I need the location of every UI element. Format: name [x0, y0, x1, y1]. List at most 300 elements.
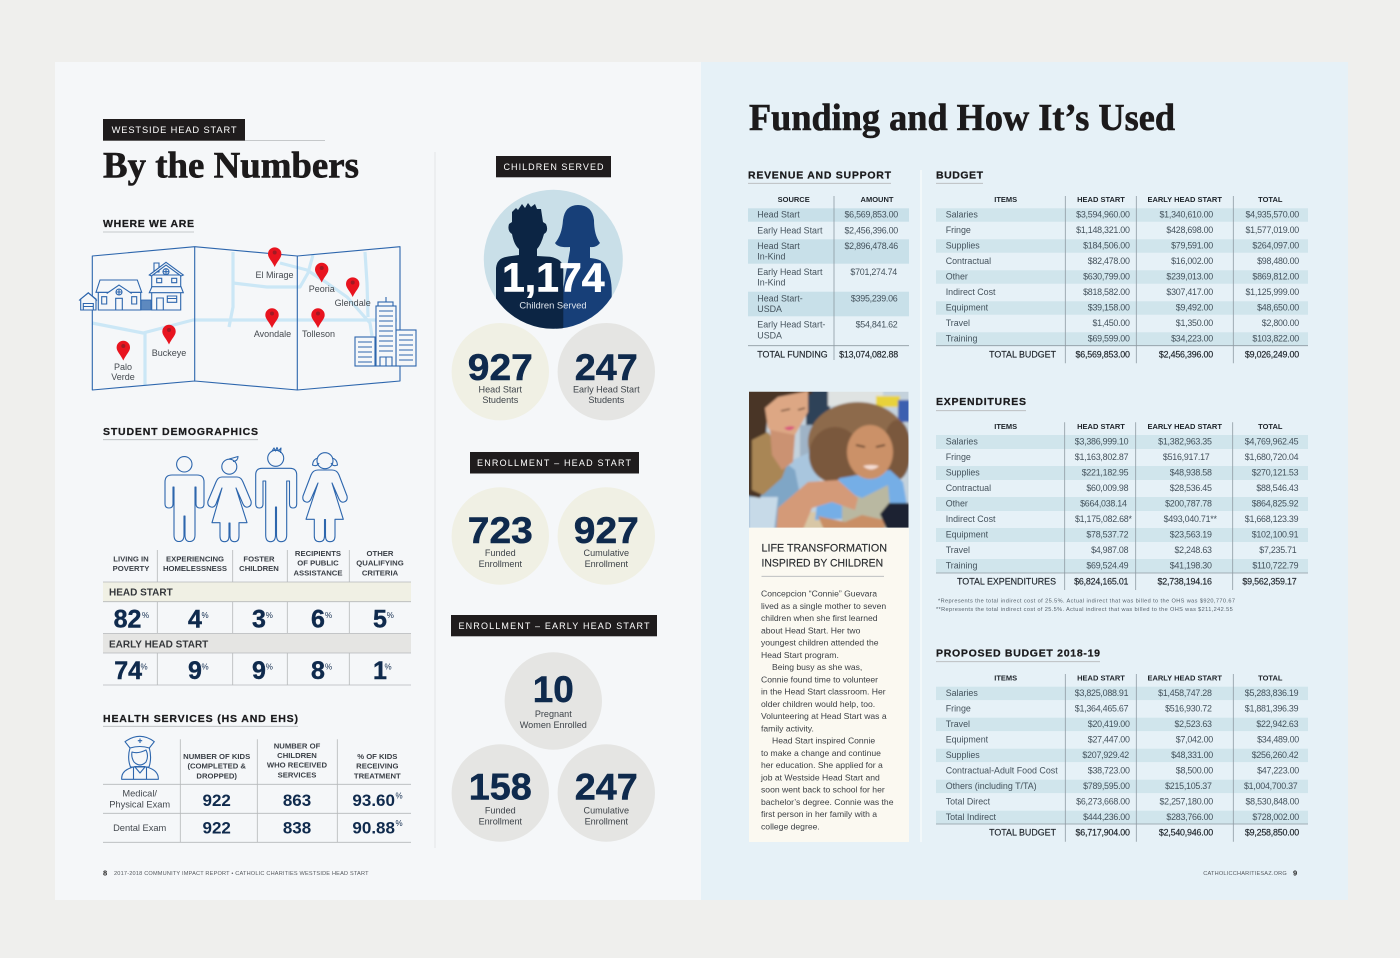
- band: Head Start: [103, 582, 411, 602]
- pin: Buckeye: [152, 325, 186, 358]
- title: Funding and How It's Used: Funding and How It’s Used: [749, 97, 1175, 139]
- table: revenue and support: Head Start: [757, 241, 800, 251]
- table: expenditures: $516,917.17: [1163, 452, 1210, 462]
- table: budget: Supplies: [946, 241, 980, 251]
- table: student demographics: [103, 549, 411, 685]
- table: budget: $82,478.00: [1088, 256, 1130, 266]
- table: proposed budget 2018-19: $2,540,946.00: [1159, 828, 1213, 838]
- table: revenue and support: AMOUNT: [861, 195, 894, 204]
- table: budget: $48,650.00: [1257, 303, 1299, 313]
- column headers: EXPERIENCING: [166, 555, 224, 564]
- table: expenditures: Fringe: [946, 452, 971, 462]
- row: dental exam: 90.88: [352, 819, 395, 838]
- circle: 247 cumulative enrollment: [558, 744, 655, 842]
- circle: 247 Early Head Start students: [558, 323, 655, 420]
- column headers: HOMELESSNESS: [163, 564, 227, 573]
- table: proposed budget 2018-19: $1,881,396.39: [1245, 704, 1299, 714]
- column headers: RECIPIENTS: [295, 549, 341, 558]
- silhouettes: [496, 203, 612, 335]
- title: By the Numbers: By the Numbers: [103, 146, 359, 187]
- table: proposed budget 2018-19: $34,489.00: [1257, 734, 1299, 744]
- table: budget: $16,002.00: [1171, 256, 1213, 266]
- icon: nurse: [122, 736, 158, 779]
- table: budget: $428,698.00: [1166, 225, 1213, 235]
- footnotes: *Represents the total indirect cost of 25.5%. Actual indirect that was billed to the OHS was $920,770.67: [938, 598, 1235, 604]
- Early Head Start percentages: %: [140, 662, 148, 672]
- table: budget: $307,417.00: [1166, 287, 1213, 297]
- story title: [762, 543, 887, 576]
- heading: Budget: BUDGET: [936, 169, 984, 181]
- table: proposed budget 2018-19: Salaries: [946, 688, 978, 698]
- pin: Peoria: [309, 263, 335, 294]
- story body text: about Head Start. Her two: [761, 625, 861, 635]
- table: budget: $34,223.00: [1171, 334, 1213, 344]
- icon: houses: [79, 262, 183, 310]
- Early Head Start percentages: %: [202, 662, 209, 672]
- row: dental exam: Dental Exam: [113, 823, 167, 833]
- Early Head Start percentages: 9: [188, 657, 202, 685]
- health column headers: TREATMENT: [354, 771, 401, 780]
- table: proposed budget 2018-19: $48,331.00: [1171, 750, 1213, 760]
- Head Start percentages: 4: [188, 605, 202, 633]
- circle: 158 funded enrollment: 158: [469, 766, 532, 808]
- section tag: Westside Head Start: WESTSIDE HEAD START: [112, 125, 237, 135]
- table: expenditures: $28,536.45: [1170, 483, 1212, 493]
- heading: Revenue and Support: REVENUE AND SUPPORT: [748, 169, 892, 181]
- row: medical exam: 93.60: [352, 791, 395, 810]
- heading: Where We Are: WHERE WE ARE: [103, 218, 194, 230]
- table: proposed budget 2018-19: Total Direct: [946, 796, 991, 806]
- Early Head Start percentages: %: [266, 662, 273, 672]
- story body text: Being busy as she was,: [772, 662, 862, 672]
- circle: 247 cumulative enrollment: Cumulative: [584, 806, 629, 816]
- band: Early Head Start: [103, 634, 411, 653]
- row: medical exam: 863: [283, 791, 311, 810]
- table: budget: $1,577,019.00: [1245, 225, 1299, 235]
- tag: Enrollment Head Start: [470, 452, 639, 474]
- table: expenditures: $88,546.43: [1256, 483, 1299, 493]
- circle: 247 cumulative enrollment: Enrollment: [585, 816, 629, 826]
- circle: 927 Head Start students: Students: [482, 395, 519, 405]
- table: expenditures: $23,563.19: [1170, 529, 1212, 539]
- table: budget: Training: [946, 334, 977, 344]
- heading: Proposed Budget: PROPOSED BUDGET 2018-19: [936, 648, 1100, 660]
- pin: El Mirage: [255, 247, 294, 280]
- table: revenue and support: TOTAL FUNDING: [757, 349, 828, 359]
- table: budget: $630,799.00: [1083, 272, 1130, 282]
- footer: right page: CATHOLICCHARITIESAZ.ORG: [1203, 871, 1287, 877]
- table: budget: TOTAL: [1258, 195, 1283, 204]
- Early Head Start percentages: 1: [373, 657, 387, 685]
- Early Head Start percentages: 8: [311, 657, 325, 685]
- band: Head Start: HEAD START: [109, 588, 173, 599]
- row: dental exam: [113, 819, 403, 838]
- Early Head Start percentages: [114, 657, 392, 685]
- table: budget: $4,935,570.00: [1245, 210, 1299, 220]
- table: expenditures: Indirect Cost: [946, 514, 996, 524]
- health column headers: RECEIVING: [356, 762, 398, 771]
- table: budget: $2,456,396.00: [1159, 349, 1213, 359]
- table: revenue and support: Head Start-: [757, 293, 803, 303]
- circle: 1,174 children served: [484, 190, 623, 335]
- table: budget: $264,097.00: [1252, 241, 1299, 251]
- story body text: her education. She applied for a: [761, 760, 883, 770]
- Head Start percentages: 5: [373, 605, 387, 633]
- band: Early Head Start: EARLY HEAD START: [109, 640, 208, 651]
- table: expenditures: TOTAL EXPENDITURES: [957, 576, 1056, 586]
- story body text: family activity.: [761, 723, 814, 733]
- table: expenditures: $221,182.95: [1082, 467, 1129, 477]
- row: medical exam: %: [396, 792, 403, 800]
- pin: Palo Verde: Palo: [114, 362, 132, 372]
- table: budget: $69,599.00: [1088, 334, 1130, 344]
- circle: 1,174 children served: 1,174: [502, 255, 605, 301]
- table: revenue and support: Early Head Start-: [757, 320, 825, 330]
- Early Head Start percentages: 9: [252, 657, 266, 685]
- table: proposed budget 2018-19: Travel: [946, 719, 970, 729]
- circle: 723 funded enrollment: Funded: [485, 548, 516, 558]
- table: proposed budget 2018-19: [936, 648, 1308, 842]
- circle: 1,174 children served: Children Served: [519, 300, 587, 311]
- table: expenditures: $1,680,720.04: [1245, 452, 1299, 462]
- table: proposed budget 2018-19: $2,257,180.00: [1159, 796, 1213, 806]
- table: proposed budget 2018-19: TOTAL: [1258, 674, 1283, 683]
- table: proposed budget 2018-19: Equipment: [946, 734, 989, 744]
- table: budget: $9,026,249.00: [1245, 349, 1299, 359]
- pin: Palo Verde: Verde: [111, 372, 135, 382]
- table: budget: Indirect Cost: [946, 287, 996, 297]
- table: revenue and support: In-Kind: [757, 251, 785, 261]
- row: medical exam: Medical/: [122, 789, 157, 799]
- table: revenue and support: Head Start: [757, 210, 800, 220]
- table: budget: TOTAL BUDGET: [989, 349, 1057, 359]
- tag: Children Served: [496, 156, 611, 177]
- Head Start percentages: %: [387, 611, 394, 620]
- table: expenditures: EARLY HEAD START: [1147, 422, 1222, 431]
- circle: 10 pregnant women: Women Enrolled: [520, 720, 587, 730]
- table: proposed budget 2018-19: $3,825,088.91: [1075, 688, 1129, 698]
- circle: 247 Early Head Start students: Students: [588, 395, 625, 405]
- table: expenditures: $78,537.72: [1086, 529, 1129, 539]
- health column headers: CHILDREN: [277, 751, 317, 760]
- panel: story: [749, 528, 909, 842]
- health column headers: NUMBER OF KIDS: [183, 752, 250, 761]
- table: expenditures: $6,824,165.01: [1074, 576, 1129, 586]
- table: proposed budget 2018-19: $1,458,747.28: [1158, 688, 1212, 698]
- table: proposed budget 2018-19: Total Indirect: [946, 812, 997, 822]
- table: budget: ITEMS: [994, 195, 1017, 204]
- story body text: children when she first learned: [761, 613, 878, 623]
- story title: LIFE TRANSFORMATION: [762, 543, 887, 555]
- table: proposed budget 2018-19: $283,766.00: [1166, 812, 1213, 822]
- health column headers: WHO RECEIVED: [267, 761, 328, 770]
- table: proposed budget 2018-19: $27,447.00: [1088, 734, 1130, 744]
- table: revenue and support: $701,274.74: [850, 267, 897, 277]
- story body text: Volunteering at Head Start was a: [761, 711, 887, 721]
- pin: El Mirage: El Mirage: [255, 270, 294, 280]
- heading: Health Services: HEALTH SERVICES (HS AND EHS): [103, 713, 298, 725]
- table: expenditures: $1,163,802.87: [1075, 452, 1129, 462]
- Head Start percentages: %: [202, 611, 209, 620]
- table: expenditures: $200,787.78: [1165, 498, 1212, 508]
- table: proposed budget 2018-19: $1,004,700.37: [1244, 781, 1298, 791]
- Head Start percentages: [114, 605, 394, 633]
- table: expenditures: Equipment: [946, 529, 989, 539]
- panel: right page: [701, 62, 1348, 900]
- table: revenue and support: $2,896,478.46: [844, 241, 898, 251]
- circle: 927 Head Start students: Head Start: [479, 384, 523, 394]
- circle: 723 funded enrollment: [452, 487, 549, 585]
- Head Start percentages: 6: [311, 605, 325, 633]
- story body text: job at Westside Head Start and: [760, 772, 880, 782]
- table: revenue and support: Early Head Start: [757, 225, 823, 235]
- health column headers: DROPPED): [196, 771, 237, 780]
- icon: four children: [165, 448, 347, 542]
- table: expenditures: $4,987.08: [1091, 545, 1129, 555]
- table: proposed budget 2018-19: $22,942.63: [1256, 719, 1299, 729]
- story body text: lived as a single mother to seven: [761, 601, 886, 611]
- health column headers: % OF KIDS: [357, 752, 397, 761]
- row: medical exam: 922: [203, 791, 231, 810]
- health column headers: (COMPLETED &: [187, 762, 246, 771]
- table: expenditures: ITEMS: [994, 422, 1017, 431]
- table: expenditures: Training: [946, 560, 977, 570]
- circle: 723 funded enrollment: Enrollment: [479, 559, 523, 569]
- table: expenditures: $1,382,963.35: [1158, 436, 1212, 446]
- column headers: FOSTER: [243, 555, 275, 564]
- table: budget: HEAD START: [1077, 195, 1125, 204]
- table: expenditures: Travel: [946, 545, 970, 555]
- column headers: LIVING IN: [113, 555, 149, 564]
- story body text: first person in her family with a: [761, 809, 877, 819]
- heading: Student Demographics: STUDENT DEMOGRAPHICS: [103, 426, 258, 438]
- circle: 158 funded enrollment: Funded: [485, 806, 516, 816]
- table: expenditures: $2,738,194.16: [1158, 576, 1212, 586]
- table: budget: [936, 169, 1308, 363]
- table: budget: Fringe: [946, 225, 971, 235]
- circle: 927 cumulative enrollment: 927: [574, 510, 639, 551]
- heading: Expenditures: EXPENDITURES: [936, 396, 1026, 408]
- row: medical exam: Physical Exam: [109, 799, 170, 809]
- column headers: ASSISTANCE: [294, 568, 342, 577]
- Head Start percentages: 3: [252, 605, 266, 633]
- pin: Glendale: Glendale: [335, 298, 371, 308]
- table: budget: $9,492.00: [1176, 303, 1213, 313]
- table: expenditures: Supplies: [946, 467, 980, 477]
- table: budget: $1,450.00: [1092, 318, 1130, 328]
- table: proposed budget 2018-19: $444,236.00: [1083, 812, 1130, 822]
- table: expenditures: $2,248.63: [1174, 545, 1212, 555]
- table: proposed budget 2018-19: $9,258,850.00: [1245, 828, 1299, 838]
- footer: left page: 8: [103, 869, 107, 878]
- table: revenue and support: SOURCE: [778, 195, 810, 204]
- table: expenditures: $270,121.53: [1252, 467, 1299, 477]
- table: budget: EARLY HEAD START: [1147, 195, 1222, 204]
- table: revenue and support: $2,456,396.00: [844, 225, 898, 235]
- row: dental exam: 922: [203, 819, 231, 838]
- story body text: bachelor’s degree. Connie was the: [761, 797, 894, 807]
- column headers: OTHER: [367, 549, 394, 558]
- story body text: Head Start program.: [761, 650, 839, 660]
- table: budget: $103,822.00: [1252, 334, 1299, 344]
- table: revenue and support: [748, 169, 909, 360]
- Head Start percentages: %: [325, 611, 332, 620]
- column headers: OF PUBLIC: [297, 559, 339, 568]
- map: service locations: [79, 247, 416, 390]
- map outline: [92, 247, 400, 390]
- table: expenditures: Other: [946, 498, 968, 508]
- pin: Tolleson: Tolleson: [302, 329, 335, 339]
- table: expenditures: $41,198.30: [1170, 560, 1212, 570]
- table: budget: Travel: [946, 318, 970, 328]
- table: expenditures: $1,668,123.39: [1245, 514, 1299, 524]
- story body text: youngest children attended the: [761, 638, 879, 648]
- table: budget: Equipment: [946, 303, 989, 313]
- pin: Palo Verde: [111, 341, 135, 382]
- footer: right page: [1203, 869, 1297, 878]
- table: expenditures: [936, 396, 1308, 613]
- table: proposed budget 2018-19: HEAD START: [1077, 674, 1125, 683]
- table: budget: $1,340,610.00: [1159, 210, 1213, 220]
- table: budget: Contractual: [946, 256, 991, 266]
- table: expenditures: HEAD START: [1077, 422, 1125, 431]
- tag: Enrollment Early Head Start: ENROLLMENT – EARLY HEAD START: [458, 621, 650, 631]
- story body text: Concepcion “Connie” Guevara: [761, 588, 877, 598]
- story body text: college degree.: [761, 821, 820, 831]
- health column headers: SERVICES: [278, 770, 316, 779]
- table: proposed budget 2018-19: Fringe: [946, 704, 971, 714]
- circle: 10 pregnant women: Pregnant: [535, 709, 572, 719]
- table: health services: [103, 739, 411, 842]
- table: proposed budget 2018-19: $789,595.00: [1083, 781, 1130, 791]
- table: expenditures: $9,562,359.17: [1242, 576, 1297, 586]
- table: revenue and support: $6,569,853.00: [844, 210, 898, 220]
- circle: 247 cumulative enrollment: 247: [575, 766, 638, 808]
- table: budget: Other: [946, 272, 968, 282]
- table: expenditures: $493,040.71**: [1164, 514, 1217, 524]
- footnotes: [936, 598, 1235, 613]
- footer: right page: 9: [1293, 869, 1297, 878]
- story body text: older children would help, too.: [761, 699, 875, 709]
- table: revenue and support: Early Head Start: [757, 267, 823, 277]
- table: proposed budget 2018-19: TOTAL BUDGET: [989, 828, 1057, 838]
- pin: Peoria: Peoria: [309, 284, 335, 294]
- table: proposed budget 2018-19: $5,283,836.19: [1245, 688, 1299, 698]
- column headers: POVERTY: [113, 564, 149, 573]
- table: proposed budget 2018-19: $8,500.00: [1176, 766, 1213, 776]
- table: revenue and support: $54,841.62: [856, 320, 898, 330]
- table: budget: $98,480.00: [1257, 256, 1299, 266]
- Head Start percentages: %: [142, 611, 149, 620]
- table: expenditures: Contractual: [946, 483, 991, 493]
- footer: left page: [103, 869, 369, 878]
- table: expenditures: $3,386,999.10: [1075, 436, 1129, 446]
- circle: 10 pregnant women: [505, 652, 602, 750]
- table: revenue and support: USDA: [757, 330, 782, 340]
- story body text: Connie found time to volunteer: [761, 674, 878, 684]
- table: budget: $39,158.00: [1088, 303, 1130, 313]
- table: budget: $1,125,999.00: [1245, 287, 1299, 297]
- circle: 927 cumulative enrollment: Cumulative: [584, 548, 629, 558]
- table: budget: $79,591.00: [1171, 241, 1213, 251]
- footer: left page: 2017-2018 COMMUNITY IMPACT REPORT • CATHOLIC CHARITIES WESTSIDE HEAD START: [114, 871, 369, 877]
- story body text: in the Head Start classroom. Her: [761, 687, 886, 697]
- table: budget: $184,506.00: [1083, 241, 1130, 251]
- circle: 247 Early Head Start students: 247: [575, 347, 638, 388]
- panel: left page: [55, 62, 701, 900]
- table: expenditures: $48,938.58: [1170, 467, 1212, 477]
- table: expenditures: $60,009.98: [1086, 483, 1129, 493]
- circle: 10 pregnant women: 10: [533, 669, 574, 710]
- circle: 158 funded enrollment: [452, 744, 549, 842]
- table: proposed budget 2018-19: $20,419.00: [1088, 719, 1130, 729]
- circle: 247 Early Head Start students: Early Head Start: [573, 384, 640, 394]
- circle: 158 funded enrollment: Enrollment: [479, 816, 523, 826]
- column headers: CRITERIA: [362, 568, 399, 577]
- Head Start percentages: 82: [114, 605, 141, 633]
- table: budget: $6,569,853.00: [1076, 349, 1130, 359]
- table: budget: $869,812.00: [1252, 272, 1299, 282]
- circle: 927 Head Start students: [452, 323, 549, 420]
- Early Head Start percentages: %: [325, 662, 332, 672]
- table: revenue and support: $395,239.06: [851, 293, 898, 303]
- story title: INSPIRED BY CHILDREN: [762, 558, 883, 570]
- table: revenue and support: $13,074,082.88: [839, 349, 898, 359]
- section tag: Westside Head Start: [103, 119, 325, 141]
- table: revenue and support: In-Kind: [757, 278, 785, 288]
- table: proposed budget 2018-19: $2,523.63: [1174, 719, 1212, 729]
- table: proposed budget 2018-19: EARLY HEAD START: [1147, 674, 1222, 683]
- row: dental exam: %: [396, 819, 403, 828]
- table: expenditures: Salaries: [946, 436, 978, 446]
- table: budget: $818,582.00: [1083, 287, 1130, 297]
- circle: 927 Head Start students: 927: [468, 347, 533, 388]
- photo: mother and child with phone: [749, 392, 908, 528]
- pin: Tolleson: [302, 308, 335, 339]
- column headers: CHILDREN: [239, 564, 279, 573]
- tag: Enrollment Head Start: ENROLLMENT – HEAD START: [477, 458, 632, 468]
- table: proposed budget 2018-19: $256,260.42: [1252, 750, 1299, 760]
- column headers: QUALIFYING: [356, 559, 404, 568]
- table: budget: $2,800.00: [1262, 318, 1299, 328]
- story body text: soon went back to school for her: [761, 785, 885, 795]
- table: revenue and support: USDA: [757, 304, 782, 314]
- table: proposed budget 2018-19: Contractual-Adult Food Cost: [946, 766, 1058, 776]
- circle: 927 cumulative enrollment: [558, 487, 655, 585]
- table: proposed budget 2018-19: $7,042.00: [1176, 734, 1213, 744]
- table: proposed budget 2018-19: $6,717,904.00: [1076, 828, 1130, 838]
- circle: 723 funded enrollment: 723: [468, 510, 533, 551]
- table: proposed budget 2018-19: Others (including T/TA): [946, 781, 1037, 791]
- table: expenditures: $1,175,082.68*: [1075, 514, 1132, 524]
- tag: Enrollment Early Head Start: [451, 615, 657, 636]
- story body text: [760, 588, 894, 831]
- table: budget: $1,148,321.00: [1076, 225, 1130, 235]
- icon: city buildings: [355, 297, 416, 366]
- table: expenditures: $110,722.79: [1252, 560, 1299, 570]
- table: proposed budget 2018-19: $207,929.42: [1082, 750, 1129, 760]
- health column headers: NUMBER OF: [274, 741, 321, 750]
- table: budget: $239,013.00: [1166, 272, 1213, 282]
- Early Head Start percentages: %: [384, 662, 392, 672]
- table: proposed budget 2018-19: $728,002.00: [1252, 812, 1299, 822]
- table: proposed budget 2018-19: $38,723.00: [1088, 766, 1130, 776]
- table: expenditures: TOTAL: [1258, 422, 1283, 431]
- map roads: [92, 252, 397, 385]
- table: budget: $1,350.00: [1176, 318, 1213, 328]
- footnotes: **Represents the total indirect cost of 25.5%. Actual indirect that was billed to the OHS was $211,242.55: [936, 607, 1233, 613]
- table: proposed budget 2018-19: Supplies: [946, 750, 980, 760]
